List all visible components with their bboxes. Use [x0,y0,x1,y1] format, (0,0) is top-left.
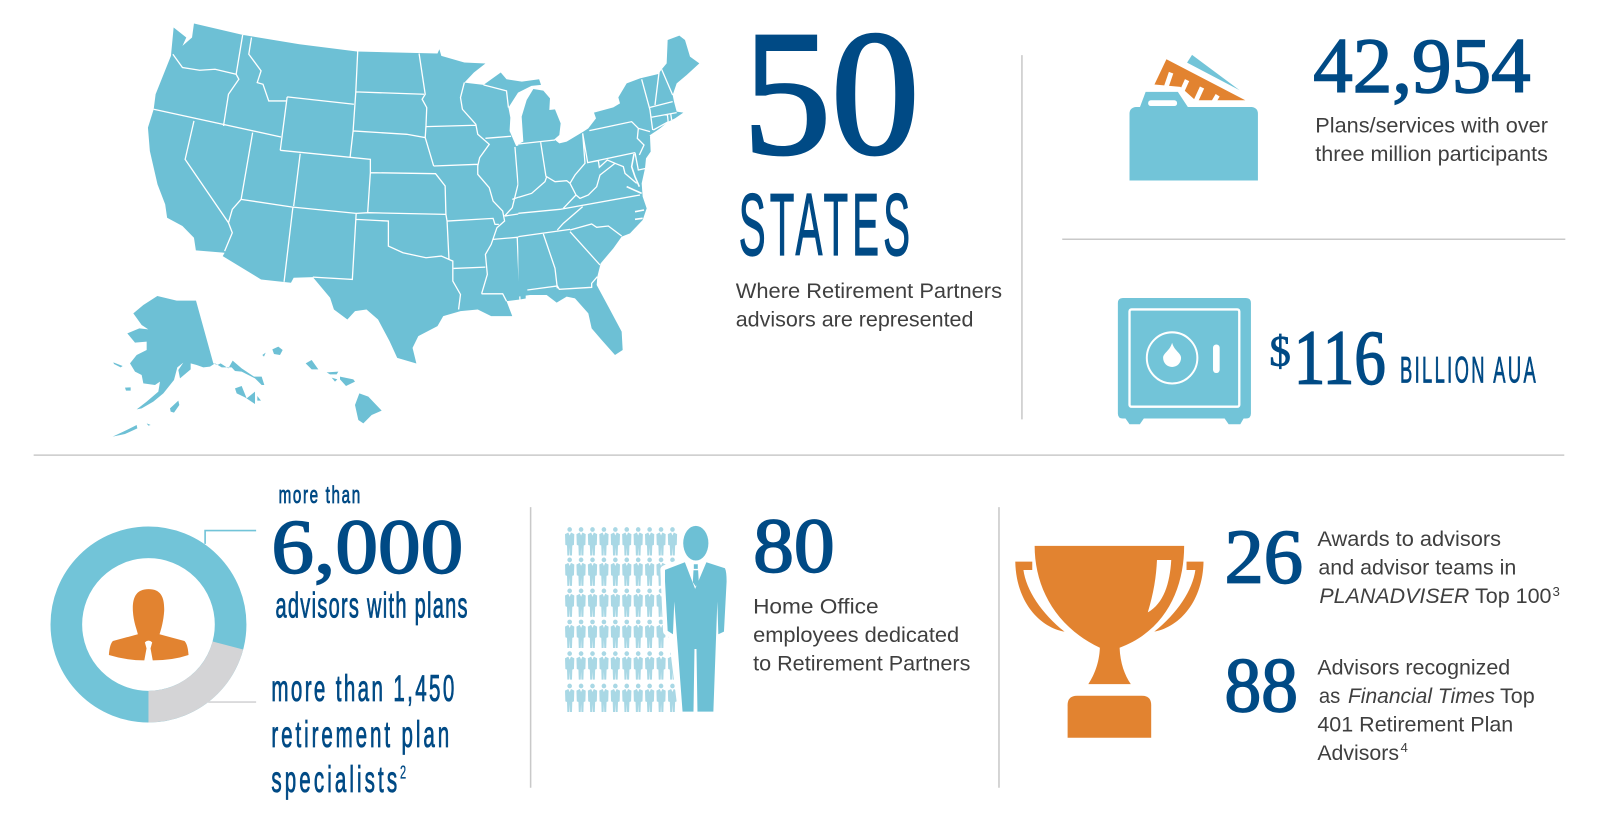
stat: 26 awards: 3 [1553,584,1560,599]
map: United States [113,24,699,437]
stat: 88 advisors recognized: 401 Retirement Plan [1317,713,1513,737]
text: retirement plan specialists [271,669,454,800]
text: retirement plan specialists: retirement plan [271,715,449,756]
icon: trophy [1015,546,1204,738]
map: Alaska and Hawaii [113,296,382,437]
stat: 42,954 plans: 42,954 [1313,22,1531,109]
stat: 88 advisors recognized: Advisors [1317,741,1399,765]
stat: 26 awards: PLANADVISER [1319,584,1469,608]
stat: 42,954 plans: Plans/services with over [1315,114,1548,138]
stat: 6,000 advisors: 6,000 [271,503,463,589]
chart: advisors donut [66,531,256,707]
text: where advisors are represented [736,279,1002,332]
stat: 88 advisors recognized: Financial Times [1348,684,1495,708]
stat: 88 advisors recognized: Top [1500,684,1535,708]
stat: $116 billion AUA: 116 [1294,315,1386,401]
stat: 88 advisors recognized: Advisors recognized [1317,655,1510,679]
stat: 42,954 plans: three million participants [1315,142,1548,166]
text: retirement plan specialists: more than 1,450 [271,669,454,710]
text: retirement plan specialists: specialists [271,760,397,800]
stat: 6,000 advisors: more than [279,483,360,509]
stat: 80 home office employees: to Retirement Partners [753,651,970,675]
stat: 6,000 advisors [271,483,468,626]
stat: 88 advisors recognized: as [1319,684,1340,708]
stat: $116 billion AUA: $ [1269,328,1291,375]
text: where advisors are represented: Where Retirement Partners [736,279,1002,303]
stat: 88 advisors recognized [1224,642,1535,765]
stat: 80 home office employees: Home Office [753,594,879,618]
stat: 26 awards: Awards to advisors [1317,527,1501,551]
stat: 26 awards: 26 [1224,514,1303,600]
stat: 6,000 advisors: advisors with plans [276,587,468,626]
text: retirement plan specialists: 2 [400,763,406,783]
icon: orange person [109,589,189,661]
heading: 50 states [739,0,919,274]
stat: 80 home office employees: 80 [753,502,835,588]
stat: 80 home office employees [753,502,970,675]
stat: 26 awards: Top 100 [1475,584,1552,608]
heading: 50 states: 50 [743,0,919,192]
stat: $116 billion AUA [1269,315,1536,401]
icon: crowd and businessman [565,526,727,712]
stat: 42,954 plans [1313,22,1548,166]
heading: 50 states: STATES [739,177,910,274]
icon: safe [1118,298,1251,424]
stat: 80 home office employees: employees dedicated [753,623,959,647]
stat: 88 advisors recognized: 88 [1224,642,1298,728]
text: where advisors are represented: advisors are represented [736,308,973,332]
stat: $116 billion AUA: BILLION AUA [1400,351,1536,392]
stat: 88 advisors recognized: 4 [1401,740,1408,755]
stat: 26 awards: and advisor teams in [1318,555,1516,579]
icon: businessman [665,526,727,712]
icon: folder [1128,55,1260,182]
stat: 26 awards [1224,514,1560,608]
